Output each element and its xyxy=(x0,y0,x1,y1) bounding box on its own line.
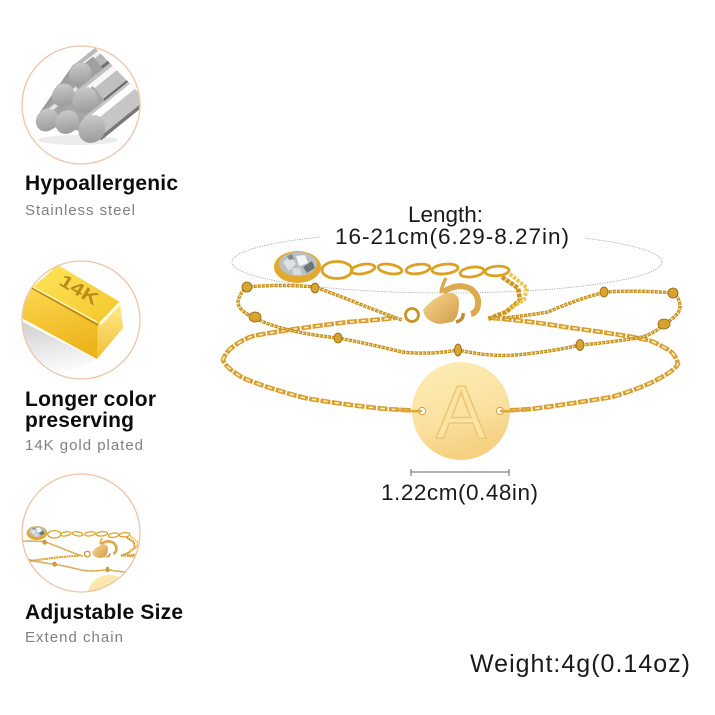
length label xyxy=(335,202,569,249)
length label: Length: xyxy=(408,202,483,227)
heading: longer color preserving: Longer color xyxy=(25,388,156,411)
caption: stainless steel: Stainless steel xyxy=(25,202,135,219)
heading: longer color preserving xyxy=(25,388,156,432)
bracelet illustration xyxy=(223,251,680,460)
icon: steel rods xyxy=(21,45,141,165)
caption: extend chain: Extend chain xyxy=(25,629,123,646)
feature: adjustable size xyxy=(21,473,182,642)
length label: 16-21cm(6.29-8.27in) xyxy=(335,224,569,249)
heading: adjustable size: Adjustable Size xyxy=(25,601,183,624)
dotted length ellipse xyxy=(232,222,662,293)
heading: hypoallergenic: Hypoallergenic xyxy=(25,172,178,195)
caption: 14K gold plated: 14K gold plated xyxy=(25,437,143,454)
heading: longer color preserving: preserving xyxy=(25,409,134,432)
disc size label: 1.22cm(0.48in) xyxy=(381,480,538,505)
feature: hypoallergenic xyxy=(22,38,178,219)
feature: color preserving xyxy=(15,261,156,454)
weight label: Weight:4g(0.14oz) xyxy=(470,650,690,678)
icon: gold bar xyxy=(15,261,140,379)
icon: gold bar: 14K xyxy=(56,270,102,309)
disc measure line xyxy=(411,469,509,476)
icon: bracelet detail xyxy=(21,473,141,593)
